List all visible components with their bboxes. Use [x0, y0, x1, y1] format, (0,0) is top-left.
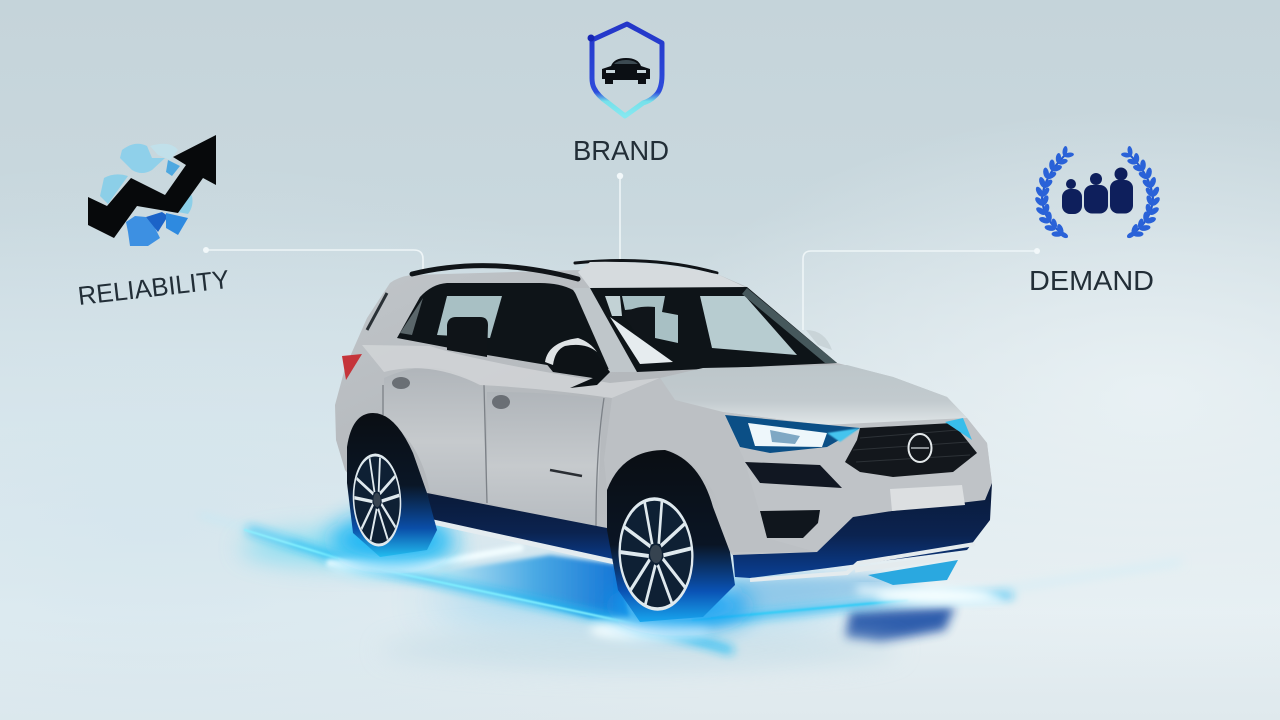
connector: demand [803, 248, 1040, 330]
reflection shadow under bumper [845, 606, 955, 642]
headlight [725, 415, 860, 453]
roof panel [578, 262, 747, 288]
side step bar [433, 522, 615, 562]
arrow [88, 135, 216, 238]
rear side window [437, 296, 502, 338]
bumper silver bar [750, 544, 975, 580]
car [330, 261, 992, 628]
front face silver [723, 412, 992, 552]
connector: brand [617, 173, 623, 262]
door panels [384, 367, 603, 527]
label: reliability: RELIABILITY [76, 264, 231, 311]
car rear wheel glow [330, 514, 454, 566]
front wheel [607, 450, 735, 622]
lower bumper [733, 483, 992, 578]
rear seat [447, 317, 488, 357]
windshield frame [590, 287, 837, 372]
connector: reliability [203, 247, 423, 272]
side window frame [397, 283, 610, 378]
far-side mirror [806, 330, 832, 350]
door handles [392, 377, 510, 409]
roof rails [412, 261, 717, 279]
label: brand: BRAND [573, 135, 669, 166]
icon: rising arrow with puzzle pieces [88, 135, 216, 246]
rear wheel [347, 413, 437, 557]
label: demand: DEMAND [1029, 265, 1154, 296]
laurel left [1034, 146, 1074, 239]
three people [1062, 168, 1133, 214]
car glyph [602, 58, 650, 84]
a-pillar [573, 288, 637, 372]
floor glow and light lines [200, 515, 1180, 672]
side badge [550, 470, 582, 476]
front fender [604, 378, 817, 552]
side mirror [545, 338, 610, 388]
rear quarter window [400, 298, 423, 335]
car body shell [335, 270, 992, 578]
grille [845, 418, 977, 477]
door seams [383, 385, 604, 527]
windshield glass [605, 288, 837, 364]
front seat [623, 307, 655, 340]
number plate [890, 485, 965, 511]
rear side slit [367, 293, 387, 330]
lower sill dark [427, 493, 618, 565]
bumper cyan underglow [868, 560, 958, 585]
upper air intake [745, 462, 842, 488]
fog recess [760, 510, 820, 538]
tail light [342, 354, 362, 380]
laurel right [1121, 146, 1161, 239]
shoulder highlight [362, 345, 660, 398]
hood [660, 365, 967, 425]
icon: demand laurel with people [1034, 146, 1161, 239]
windshield white reflection [610, 317, 673, 364]
car front wheel glow [610, 584, 750, 628]
icon: brand shield with car [588, 24, 662, 116]
blue floor pool between wheels [440, 555, 630, 618]
